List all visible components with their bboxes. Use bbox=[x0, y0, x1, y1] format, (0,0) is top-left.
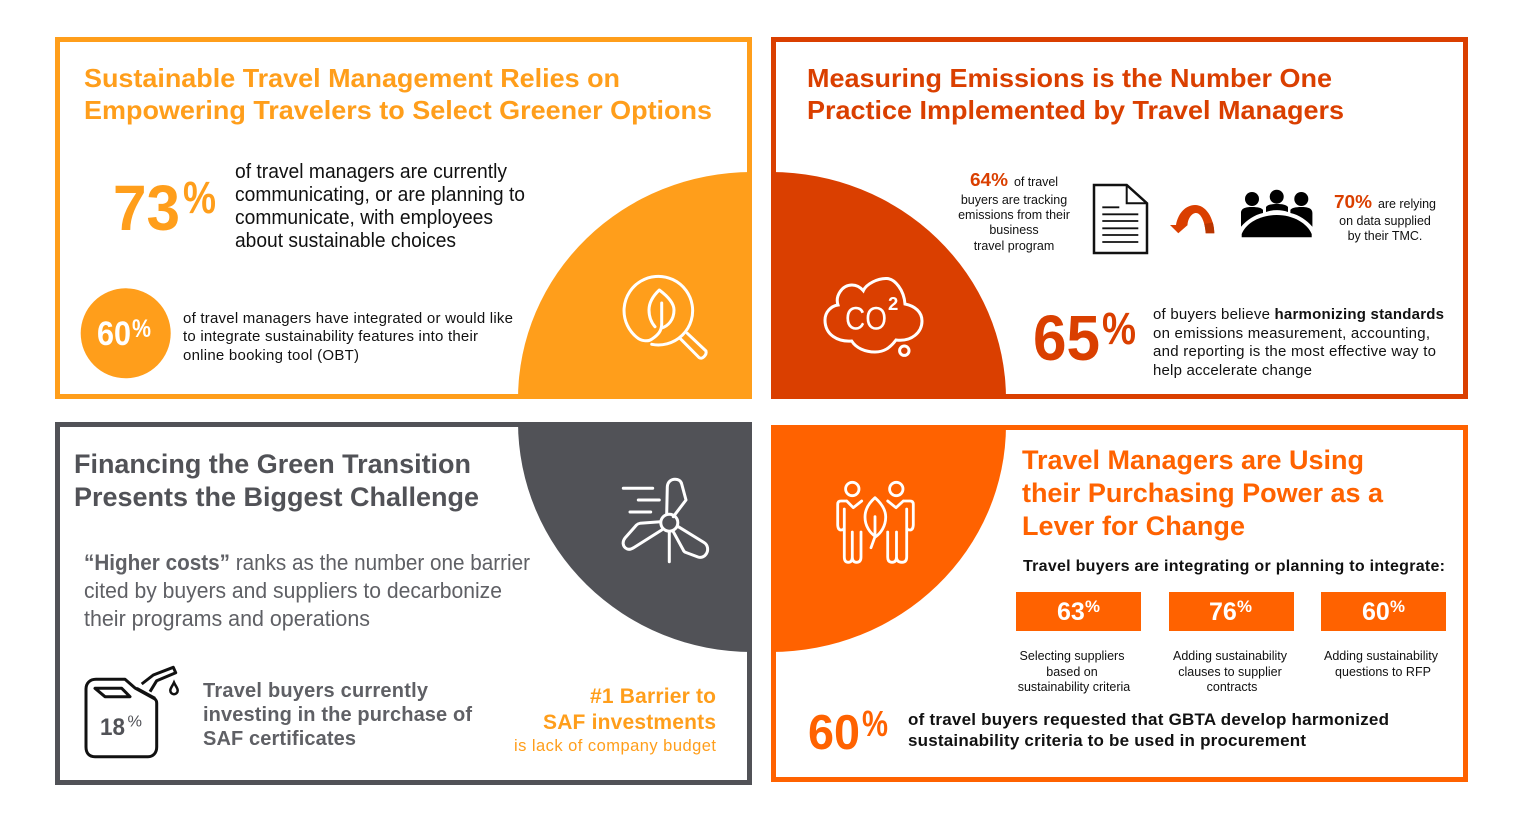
text: harmonized criteria bbox=[908, 710, 1389, 750]
text: SAF certificates: investing in the purchase of bbox=[203, 704, 472, 726]
text: 64% tracking emissions: of travel bbox=[1014, 175, 1058, 189]
statistic circle: 60%: 60 bbox=[97, 315, 131, 353]
heading: purchasing power bbox=[1022, 445, 1384, 541]
caption: supplier contracts: Adding sustainability bbox=[1173, 649, 1288, 663]
panel frame: gray bbox=[58, 424, 750, 782]
stat box: 63%: % bbox=[1085, 597, 1100, 616]
caption: RFP questions bbox=[1324, 649, 1439, 679]
icon: jerry can with 18%: % bbox=[128, 714, 142, 731]
text: online booking tool: of travel managers have integrated or would like bbox=[183, 310, 513, 327]
icon: two people with leaf bbox=[838, 482, 913, 562]
stat box: 76%: % bbox=[1237, 597, 1252, 616]
statistic: 65%: 65 bbox=[1033, 302, 1100, 374]
panel: financing the green transition bbox=[58, 422, 752, 782]
text: harmonizing standards bbox=[1153, 306, 1444, 379]
text: higher costs: “Higher costs” ranks as the number one barrier bbox=[84, 550, 530, 575]
arrow: curved back bbox=[1170, 205, 1214, 233]
heading: empowering travelers: Empowering Travelers to Select Greener Options bbox=[84, 95, 712, 125]
text: 70% relying on TMC data bbox=[1334, 191, 1436, 243]
text: harmonizing standards: help accelerate change bbox=[1153, 362, 1312, 379]
text: 64% tracking emissions: travel program bbox=[974, 239, 1054, 253]
statistic: 65%: % bbox=[1102, 303, 1136, 354]
statistic circle: 60% bbox=[81, 288, 171, 378]
text: number one barrier: #1 Barrier to bbox=[590, 685, 716, 708]
stat box: 76%: 76 bbox=[1209, 598, 1237, 626]
statistic: 73%: 73 bbox=[113, 172, 180, 244]
caption: supplier criteria: sustainability criteria bbox=[1018, 680, 1130, 694]
text: higher costs bbox=[84, 550, 530, 631]
text: SAF certificates bbox=[203, 680, 472, 750]
text: 64% tracking emissions: 64% bbox=[970, 169, 1008, 190]
statistic: 73% bbox=[113, 172, 216, 244]
text: harmonized criteria: of travel buyers requested that GBTA develop harmonized bbox=[908, 710, 1389, 729]
caption: supplier contracts bbox=[1173, 649, 1288, 694]
text: 64% tracking emissions bbox=[958, 169, 1070, 253]
heading: measuring emissions: Practice Implemented by Travel Managers bbox=[807, 95, 1344, 125]
stat box: 60% bbox=[1321, 592, 1446, 631]
text: harmonized criteria: sustainability criteria to be used in procurement bbox=[908, 731, 1306, 750]
text: harmonizing standards: on emissions measurement, accounting, bbox=[1153, 325, 1430, 342]
icon: jerry can with 18% bbox=[86, 667, 178, 757]
heading: measuring emissions: Measuring Emissions is the Number One bbox=[807, 63, 1332, 93]
text: 70% relying on TMC data: on data supplied bbox=[1339, 214, 1431, 228]
caption: supplier contracts: contracts bbox=[1207, 680, 1257, 694]
text: harmonizing standards: and reporting is the most effective way to bbox=[1153, 343, 1436, 360]
text: 64% tracking emissions: business bbox=[989, 223, 1039, 237]
stat box: 63%: 63 bbox=[1057, 598, 1085, 626]
text: communicating with employees: communicating, or are planning to bbox=[235, 184, 525, 206]
text: communicating with employees: about sustainable choices bbox=[235, 230, 456, 252]
icon: CO2 cloud: CO bbox=[845, 300, 887, 336]
text: number one barrier: is lack of company budget bbox=[514, 737, 716, 755]
caption: supplier criteria: based on bbox=[1046, 665, 1098, 679]
statistic: 60%: 60 bbox=[808, 706, 860, 760]
icon: jerry can with 18%: 18 bbox=[100, 714, 125, 741]
heading: empowering travelers bbox=[84, 63, 712, 125]
quarter circle: red-orange bbox=[771, 172, 1006, 399]
panel frame: bright orange bbox=[774, 428, 1466, 780]
text: higher costs: their programs and operations bbox=[84, 606, 370, 631]
icon: magnifier with leaf bbox=[624, 276, 706, 358]
text: number one barrier: SAF investments bbox=[543, 711, 716, 734]
panel frame: red-orange bbox=[774, 40, 1466, 396]
panel: empowering travelers bbox=[58, 40, 752, 399]
icon: people at table bbox=[1241, 190, 1312, 237]
text: communicating with employees bbox=[235, 161, 525, 252]
caption: supplier criteria: Selecting suppliers bbox=[1020, 649, 1124, 663]
statistic: 60%: % bbox=[862, 703, 888, 744]
caption: RFP questions: questions to RFP bbox=[1335, 665, 1431, 679]
caption: RFP questions: Adding sustainability bbox=[1324, 649, 1439, 663]
text: online booking tool bbox=[183, 310, 513, 364]
text: SAF certificates: SAF certificates bbox=[203, 728, 356, 750]
quarter circle: gray bbox=[518, 422, 752, 652]
text: 70% relying on TMC data: by their TMC. bbox=[1348, 229, 1422, 243]
statistic: 65% bbox=[1033, 302, 1136, 374]
statistic: 73%: % bbox=[183, 172, 216, 223]
stat box: 76% bbox=[1169, 592, 1294, 631]
icon: document bbox=[1094, 185, 1147, 253]
caption: supplier criteria bbox=[1018, 649, 1130, 694]
statistic: 60% bbox=[808, 703, 888, 760]
heading: purchasing power: their Purchasing Power as a bbox=[1022, 478, 1384, 508]
icon: wind turbine bbox=[623, 479, 708, 562]
text: 64% tracking emissions: emissions from their bbox=[958, 208, 1070, 222]
panel: measuring emissions bbox=[771, 40, 1466, 399]
text: online booking tool: online booking tool (OBT) bbox=[183, 347, 359, 364]
text: higher costs: cited by buyers and suppliers to decarbonize bbox=[84, 578, 502, 603]
icon: CO2 cloud bbox=[825, 278, 922, 355]
panel: purchasing power bbox=[771, 425, 1466, 780]
text: online booking tool: to integrate sustainability features into their bbox=[183, 328, 478, 345]
quarter circle: bright orange bbox=[771, 425, 1006, 652]
text: number one barrier bbox=[514, 685, 716, 755]
heading: financing: Presents the Biggest Challenge bbox=[74, 482, 479, 512]
heading: measuring emissions bbox=[807, 63, 1344, 125]
heading: financing: Financing the Green Transition bbox=[74, 449, 471, 479]
statistic circle: 60%: % bbox=[132, 315, 151, 343]
text: 64% tracking emissions: buyers are tracking bbox=[961, 193, 1067, 207]
heading: empowering travelers: Sustainable Travel Management Relies on bbox=[84, 63, 620, 93]
heading: purchasing power: Travel Managers are Using bbox=[1022, 445, 1364, 475]
text: SAF certificates: Travel buyers currently bbox=[203, 680, 429, 702]
icon: CO2 cloud: 2 bbox=[888, 293, 898, 314]
text: communicating with employees: of travel managers are currently bbox=[235, 161, 507, 183]
quarter circle: orange bbox=[518, 172, 752, 399]
heading: financing bbox=[74, 449, 479, 512]
heading: purchasing power: Lever for Change bbox=[1022, 511, 1245, 541]
panel frame: orange bbox=[58, 40, 750, 396]
stat box: 60%: % bbox=[1390, 597, 1405, 616]
text: harmonizing standards: of buyers believe harmonizing standards bbox=[1153, 306, 1444, 323]
text: 70% relying on TMC data: are relying bbox=[1378, 197, 1436, 211]
text: 70% relying on TMC data: 70% bbox=[1334, 191, 1372, 212]
subheading: integration: Travel buyers are integrating or planning to integrate: bbox=[1023, 558, 1445, 575]
stat box: 63% bbox=[1016, 592, 1141, 631]
text: communicating with employees: communicate, with employees bbox=[235, 207, 493, 229]
stat box: 60%: 60 bbox=[1362, 598, 1390, 626]
caption: supplier contracts: clauses to supplier bbox=[1178, 665, 1282, 679]
